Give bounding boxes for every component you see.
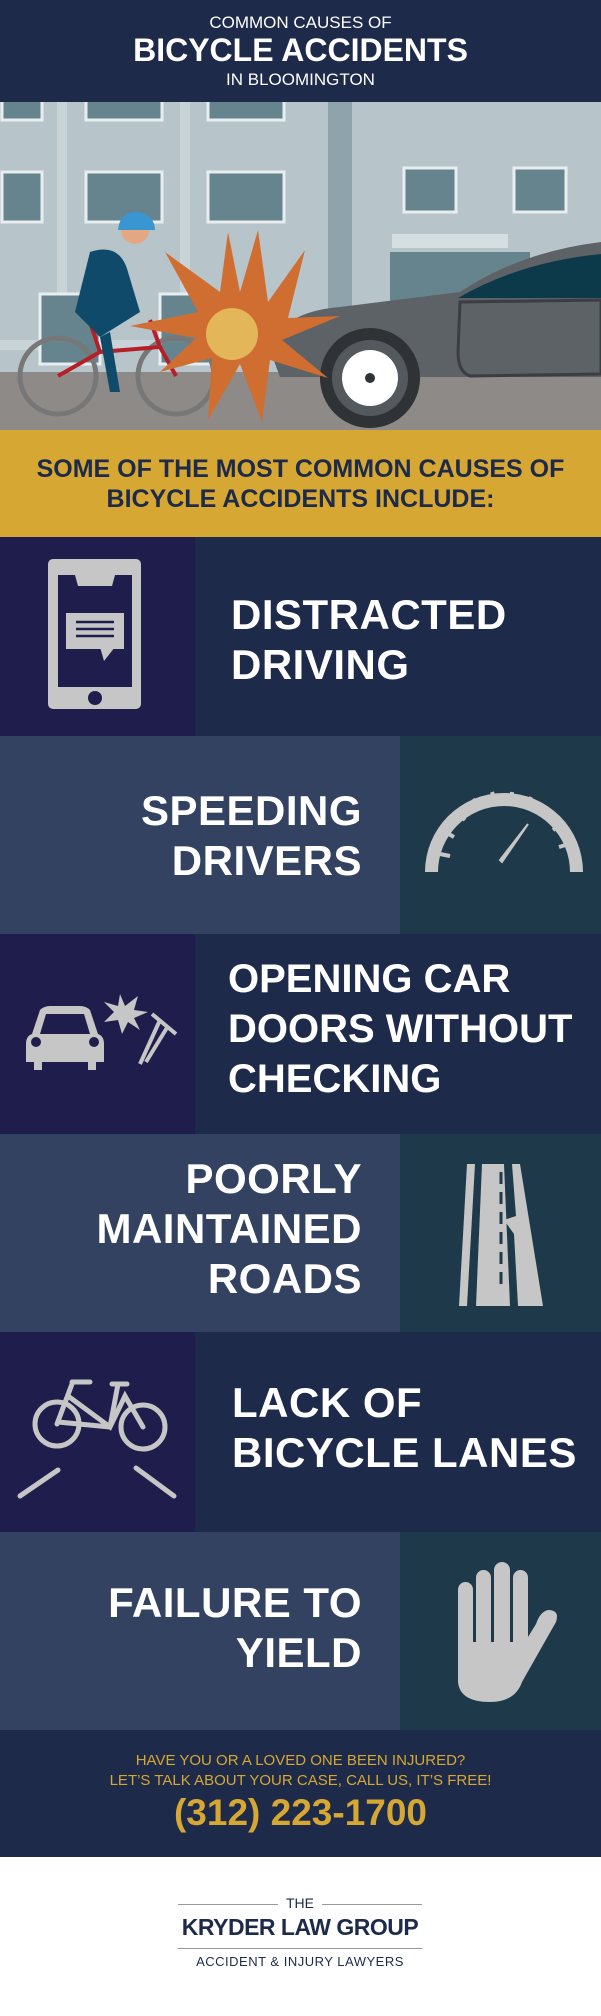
icon: bicycle lanes bbox=[0, 1332, 195, 1532]
text: LACK OF bbox=[232, 1379, 422, 1426]
text: POORLY bbox=[186, 1155, 362, 1202]
header: IN BLOOMINGTON bbox=[226, 70, 375, 89]
text: DRIVING bbox=[231, 641, 410, 688]
text: CHECKING bbox=[228, 1057, 441, 1101]
text bbox=[228, 957, 572, 1101]
car bbox=[270, 242, 601, 428]
icon: speedometer bbox=[400, 736, 601, 934]
text bbox=[232, 1379, 577, 1476]
logo bbox=[178, 1895, 422, 1969]
logo: KRYDER LAW GROUP bbox=[182, 1914, 418, 1940]
row: failure to yield bbox=[0, 1532, 601, 1731]
row: poorly maintained roads bbox=[0, 1134, 601, 1334]
text bbox=[141, 787, 362, 884]
header: BICYCLE ACCIDENTS bbox=[133, 32, 468, 68]
explosion bbox=[130, 230, 340, 422]
text: YIELD bbox=[236, 1629, 362, 1676]
gold band subtitle: SOME OF THE MOST COMMON CAUSES OF bbox=[37, 455, 564, 483]
scene illustration bbox=[0, 102, 601, 430]
icon: car and bike bbox=[0, 934, 195, 1134]
header: COMMON CAUSES OF bbox=[209, 13, 392, 32]
text: DOORS WITHOUT bbox=[228, 1007, 572, 1051]
text: FAILURE TO bbox=[108, 1579, 362, 1626]
text bbox=[231, 591, 507, 688]
text: ROADS bbox=[208, 1255, 362, 1302]
header bbox=[0, 0, 601, 102]
text bbox=[96, 1155, 362, 1302]
call to action bbox=[0, 1730, 601, 1857]
call to action: LET’S TALK ABOUT YOUR CASE, CALL US, IT’S FREE! bbox=[110, 1772, 491, 1789]
icon: phone bbox=[0, 537, 195, 736]
text: DISTRACTED bbox=[231, 591, 507, 638]
row: lack of bicycle lanes bbox=[0, 1332, 601, 1532]
text: DRIVERS bbox=[172, 837, 362, 884]
call to action: (312) 223-1700 bbox=[174, 1792, 427, 1833]
row: opening car doors bbox=[0, 934, 601, 1134]
text: SPEEDING bbox=[141, 787, 362, 834]
text: MAINTAINED bbox=[96, 1205, 362, 1252]
icon: road bbox=[400, 1134, 601, 1332]
row: distracted driving bbox=[0, 537, 601, 737]
logo: THE bbox=[286, 1895, 314, 1911]
row: speeding bbox=[0, 736, 601, 936]
text: BICYCLE LANES bbox=[232, 1429, 577, 1476]
text: OPENING CAR bbox=[228, 957, 510, 1001]
cyclist bbox=[20, 212, 214, 414]
text bbox=[108, 1579, 362, 1676]
icon: hand bbox=[400, 1532, 601, 1730]
call to action: HAVE YOU OR A LOVED ONE BEEN INJURED? bbox=[136, 1752, 465, 1769]
logo: ACCIDENT & INJURY LAWYERS bbox=[196, 1954, 404, 1969]
gold band subtitle: BICYCLE ACCIDENTS INCLUDE: bbox=[107, 485, 494, 513]
gold band subtitle bbox=[0, 430, 601, 537]
